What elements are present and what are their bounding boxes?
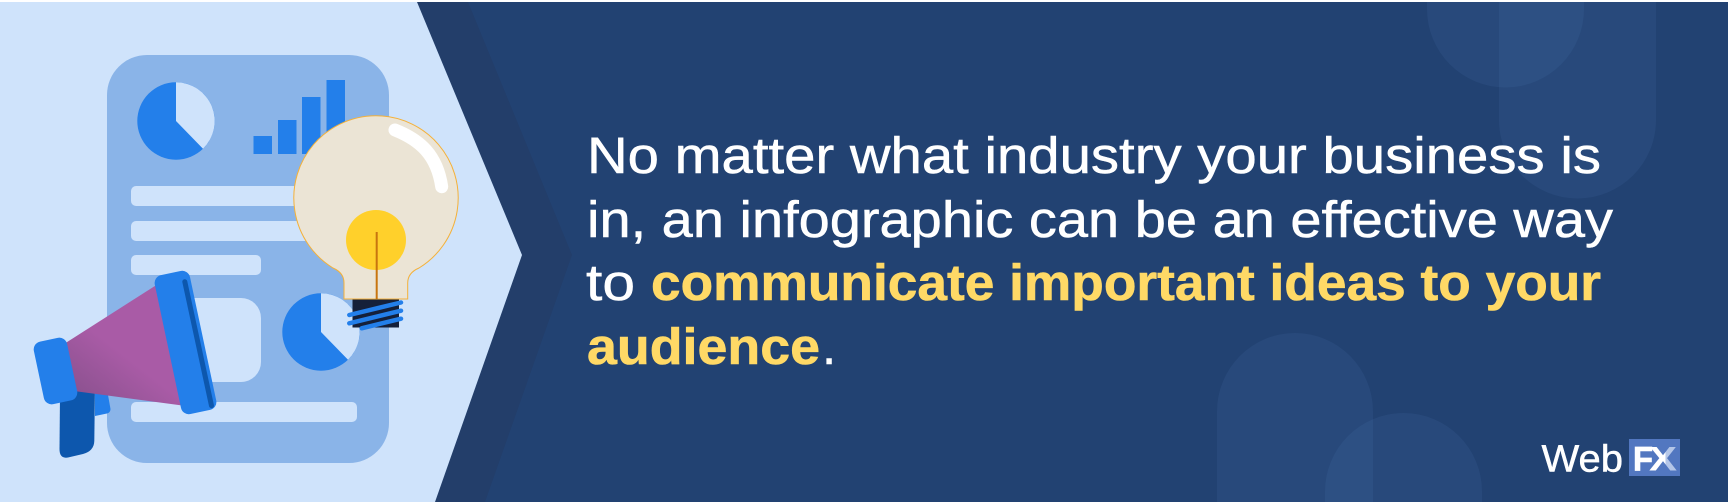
illustration: report document xyxy=(107,55,389,463)
headline text: communicate important ideas to your xyxy=(651,254,1601,311)
decorative pills xyxy=(1217,2,1656,502)
icon: light bulb xyxy=(294,116,458,328)
logo: WebFX: X xyxy=(1649,441,1677,479)
darker chevron band xyxy=(417,2,572,502)
text placeholder lines xyxy=(131,186,357,422)
headline text xyxy=(586,127,1614,375)
headline text: . xyxy=(822,318,836,375)
pie chart bottom xyxy=(282,293,360,371)
logo: WebFX: Web xyxy=(1542,438,1623,480)
bar chart xyxy=(254,80,345,154)
headline text: in, an infographic can be an effective way xyxy=(587,191,1614,248)
headline text: audience xyxy=(587,318,820,375)
icon: megaphone xyxy=(32,269,218,458)
headline text: to xyxy=(586,254,635,311)
light left panel xyxy=(0,2,522,502)
logo: WebFX xyxy=(1542,438,1680,480)
logo: WebFX: F xyxy=(1633,441,1653,479)
headline text: No matter what industry your business is xyxy=(587,127,1601,184)
pie chart top xyxy=(137,82,215,160)
